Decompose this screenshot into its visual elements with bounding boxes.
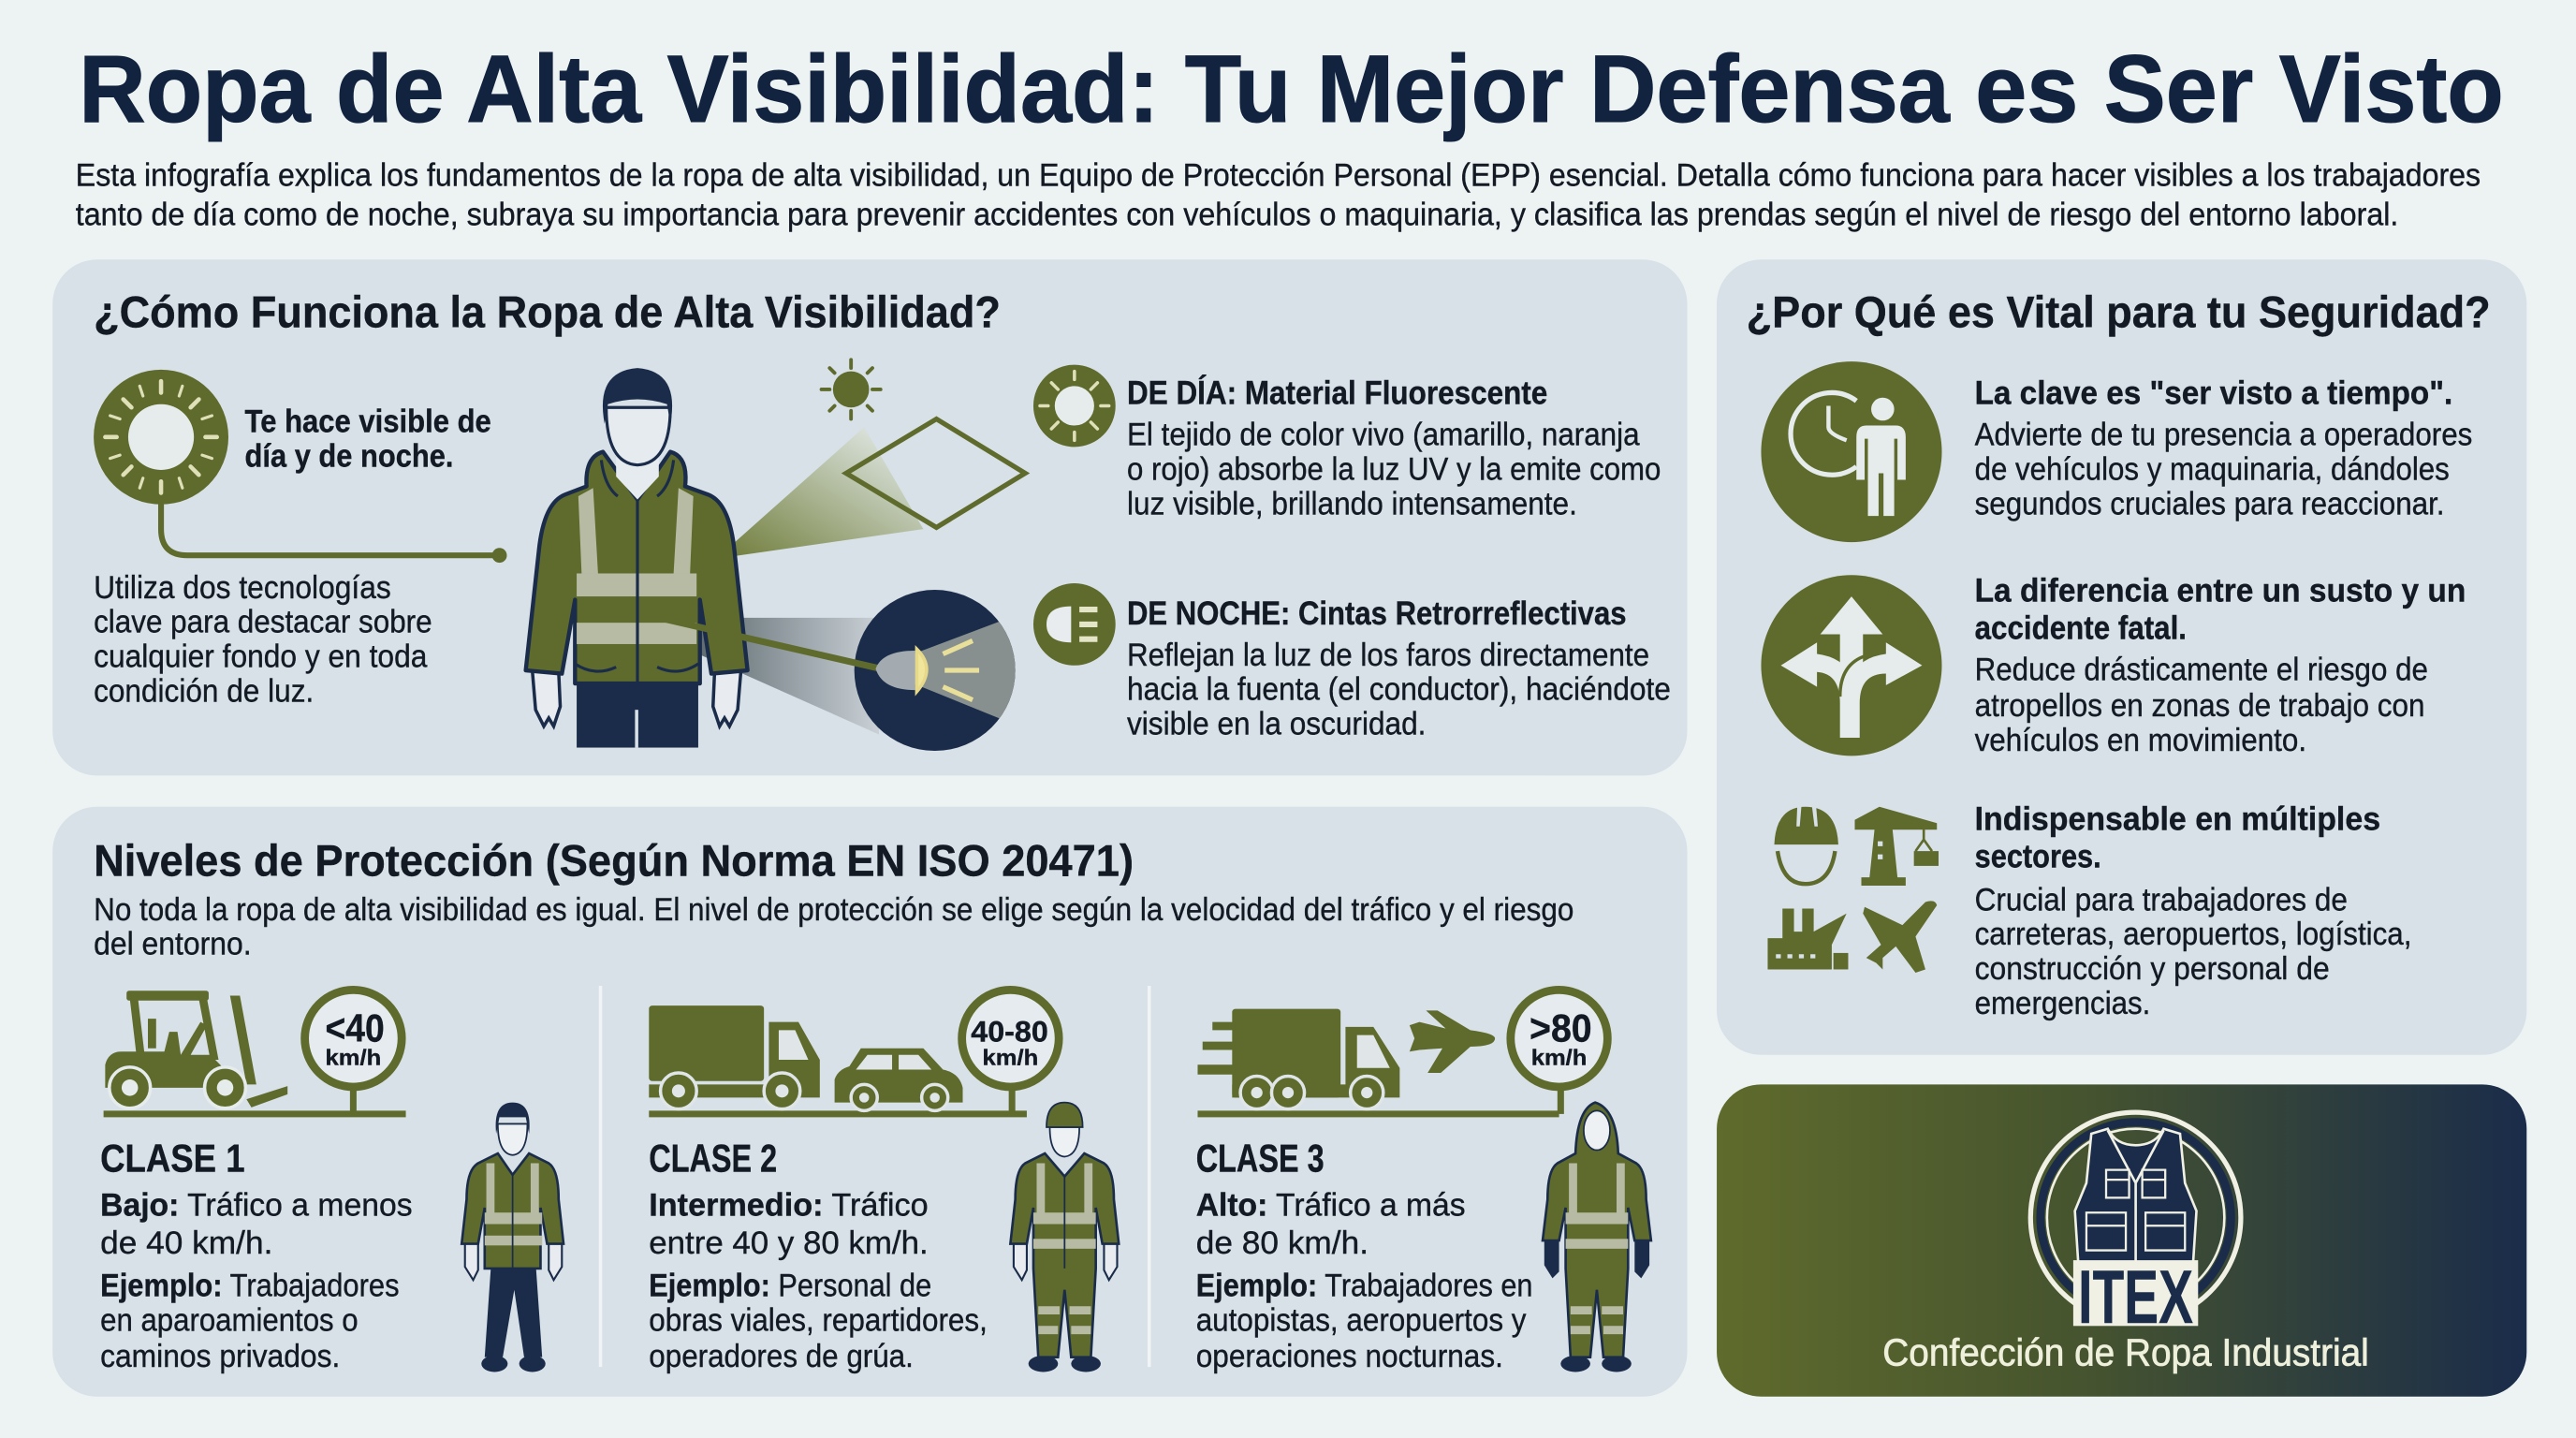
text: brand tagline: Confección de Ropa Industrial: [1882, 1330, 2369, 1373]
text: multiple sectors: carreteras, aeropuertos, logística,: [1975, 917, 2411, 952]
text: be seen in time: [1975, 375, 2472, 521]
logo: ITEX vest: [2030, 1112, 2241, 1340]
text: scare versus fatal accident: vehículos en movimiento.: [1975, 723, 2306, 758]
callout: visible day and night: Te hace visible de: [245, 404, 491, 440]
illustration: headlight beam: [690, 618, 879, 734]
text: class 3: CLASE 3: [1196, 1136, 1325, 1180]
illustration: class 1 worker: [461, 1103, 564, 1372]
text: scare versus fatal accident: La diferencia entre un susto y un: [1975, 572, 2466, 609]
text: scare versus fatal accident: atropellos en zonas de trabajo con: [1975, 688, 2424, 724]
text: be seen in time: de vehículos y maquinaria, dándoles: [1975, 451, 2450, 487]
text: day: luz visible, brillando intensamente.: [1127, 486, 1577, 521]
text: class 1: Ejemplo: Trabajadores: [100, 1269, 400, 1304]
text: two technologies: Utiliza dos tecnologías: [94, 570, 391, 606]
text: two technologies: [94, 570, 432, 709]
text: scare versus fatal accident: [1975, 572, 2466, 758]
class 2: [649, 990, 1119, 1374]
illustration: class 3 worker: [1543, 1103, 1651, 1372]
panel: how it works: [52, 259, 1687, 775]
text: class 2: operadores de grúa.: [649, 1339, 914, 1374]
text: class 2: Ejemplo: Personal de: [649, 1269, 931, 1304]
icon: speed sign 40-80: km/h: [983, 1045, 1038, 1069]
illustration: class 2 worker: [1010, 1103, 1119, 1372]
text: multiple sectors: emergencias.: [1975, 986, 2150, 1021]
text: class 2: entre 40 y 80 km/h.: [649, 1225, 929, 1261]
text: night: hacia la fuenta (el conductor), haciéndote: [1127, 672, 1671, 708]
text: protection intro: [94, 892, 1573, 962]
heading: protection levels: Niveles de Protección (Según Norma EN ISO 20471): [94, 836, 1134, 886]
illustration: light beam to fluorescent diamond: [716, 419, 1025, 559]
text: two technologies: clave para destacar sobre: [94, 605, 432, 640]
text: two technologies: cualquier fondo y en toda: [94, 639, 428, 675]
text: class 1: Bajo: Tráfico a menos: [100, 1188, 413, 1224]
class 1: [100, 990, 564, 1374]
text: day: [1127, 374, 1661, 521]
text: protection intro: del entorno.: [94, 927, 252, 962]
text: night: Reflejan la luz de los faros directamente: [1127, 638, 1649, 673]
text: multiple sectors: construcción y personal de: [1975, 951, 2330, 987]
text: night: visible en la oscuridad.: [1127, 706, 1426, 741]
icon: speed sign under 40: <40: [326, 1006, 385, 1050]
text: be seen in time: Advierte de tu presencia a operadores: [1975, 418, 2472, 453]
text: scare versus fatal accident: accidente fatal.: [1975, 610, 2187, 647]
text: day: El tejido de color vivo (amarillo, naranja: [1127, 418, 1640, 453]
panel: brand: [1717, 1084, 2526, 1397]
icon: small sun: [822, 360, 881, 419]
text: class 3: Alto: Tráfico a más: [1196, 1188, 1466, 1224]
text: be seen in time: segundos cruciales para reaccionar.: [1975, 486, 2445, 521]
text: class 3: de 80 km/h.: [1196, 1225, 1368, 1261]
panel: why it matters: [1717, 259, 2526, 1055]
intro text: [76, 157, 2481, 232]
text: night: [1127, 595, 1671, 741]
text: day: o rojo) absorbe la luz UV y la emite como: [1127, 451, 1661, 487]
icon: forklift: [104, 990, 406, 1114]
icon: sectors: [1767, 807, 1939, 973]
icon: speed sign over 80: [1511, 990, 1607, 1114]
callout: visible day and night: [245, 404, 491, 474]
icon: speed sign 40-80: 40-80: [971, 1015, 1048, 1049]
icon: speed sign under 40: [305, 990, 402, 1114]
icon: day badge: [1033, 365, 1116, 447]
icon: night badge: [1033, 583, 1116, 666]
heading: why it matters: ¿Por Qué es Vital para tu Seguridad?: [1747, 287, 2491, 337]
text: multiple sectors: Crucial para trabajadores de: [1975, 882, 2348, 917]
text: class 1: caminos privados.: [100, 1339, 340, 1374]
text: multiple sectors: sectores.: [1975, 839, 2101, 875]
icon: speed sign over 80: >80: [1530, 1006, 1592, 1050]
text: multiple sectors: [1975, 800, 2411, 1021]
text: class 3: Ejemplo: Trabajadores en: [1196, 1269, 1532, 1304]
panel: protection levels: [52, 807, 1687, 1397]
text: class 1: de 40 km/h.: [100, 1225, 272, 1261]
text: class 3: operaciones nocturnas.: [1196, 1339, 1503, 1374]
illustration: headlight circle: [659, 590, 1027, 751]
icon: car: [835, 1049, 963, 1110]
icon: speed sign under 40: km/h: [326, 1045, 381, 1069]
text: class 2: Intermedio: Tráfico: [649, 1188, 929, 1224]
icon: diverging arrows: [1761, 575, 1942, 756]
heading: how it works: ¿Cómo Funciona la Ropa de Alta Visibilidad?: [94, 287, 1001, 337]
text: scare versus fatal accident: Reduce drásticamente el riesgo de: [1975, 653, 2428, 688]
text: class 2: obras viales, repartidores,: [649, 1303, 988, 1339]
title: Ropa de Alta Visibilidad: Tu Mejor Defensa es Ser Visto: [79, 36, 2504, 142]
icon: fast truck: [1197, 1009, 1559, 1114]
icon: sun badge: [94, 370, 506, 563]
icon: truck: [649, 1005, 1027, 1114]
text: two technologies: condición de luz.: [94, 673, 314, 709]
text: night: DE NOCHE: Cintas Retrorreflectivas: [1127, 595, 1627, 632]
text: class 1: CLASE 1: [100, 1136, 245, 1180]
illustration: worker in high visibility jacket: [526, 368, 748, 748]
callout: visible day and night: día y de noche.: [245, 438, 453, 474]
icon: plane: [1410, 1010, 1495, 1073]
text: be seen in time: La clave es "ser visto a tiempo".: [1975, 375, 2452, 412]
icon: speed sign over 80: km/h: [1531, 1045, 1587, 1069]
intro text: tanto de día como de noche, subraya su importancia para prevenir accidentes con vehículos o maquinaria, y clasifica las prendas según el nivel de riesgo del entorno laboral.: [76, 197, 2398, 232]
class 3: [1196, 990, 1651, 1374]
text: class 3: [1196, 1136, 1532, 1374]
icon: clock and person: [1761, 361, 1942, 542]
logo: ITEX vest: ITEX: [2078, 1255, 2193, 1340]
text: class 1: en aparoamientos o: [100, 1303, 359, 1339]
text: class 3: autopistas, aeropuertos y: [1196, 1303, 1527, 1339]
intro text: Esta infografía explica los fundamentos de la ropa de alta visibilidad, un Equipo de Protección Personal (EPP) esencial. Detalla cómo funciona para hacer visibles a los trabajadores: [76, 157, 2481, 193]
text: multiple sectors: Indispensable en múltiples: [1975, 800, 2380, 837]
text: class 1: [100, 1136, 413, 1374]
text: class 2: CLASE 2: [649, 1136, 777, 1180]
icon: speed sign 40-80: [962, 990, 1059, 1114]
text: day: DE DÍA: Material Fluorescente: [1127, 374, 1547, 412]
text: class 2: [649, 1136, 988, 1374]
text: protection intro: No toda la ropa de alta visibilidad es igual. El nivel de protección se elige según la velocidad del tráfico y el riesgo: [94, 892, 1573, 928]
